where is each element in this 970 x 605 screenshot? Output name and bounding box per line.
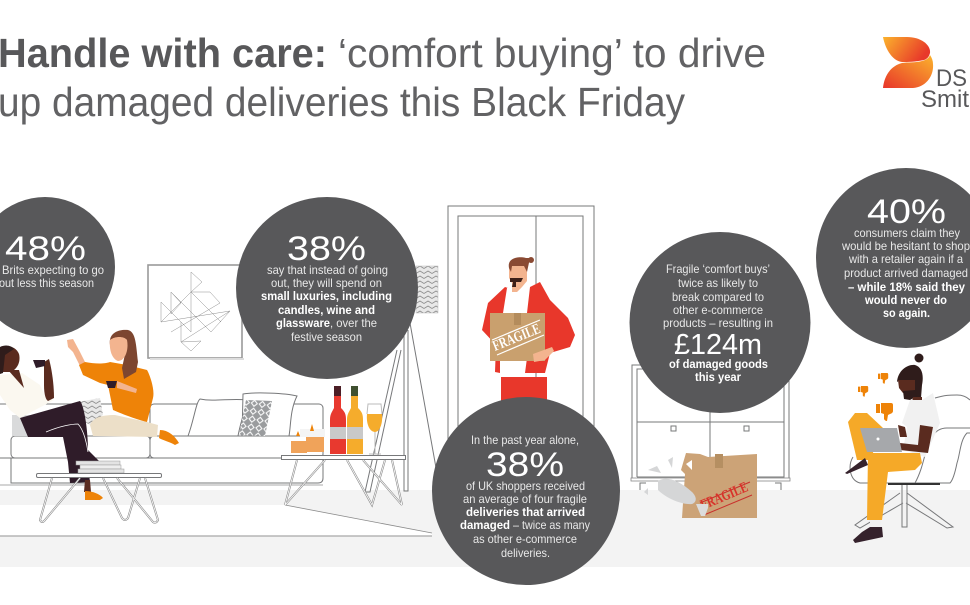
floor [0,490,970,567]
stat circle: 38% damaged deliveries: an average of four fragile [463,492,587,506]
stat circle: 48%: 48% [5,230,86,268]
stat circle: 38% small luxuries: festive season [291,330,362,344]
cushions [188,399,248,436]
stat circle: 38% small luxuries: glassware [276,316,330,330]
stat circle: 38% damaged deliveries: as other e-commerce [473,532,577,546]
logo: DS Smith [883,37,970,113]
broken vase and damaged fragile box: FRAGILE [698,479,751,514]
stat circle: 38% small luxuries: candles, wine and [278,303,375,317]
stat circle: £124m: Fragile ‘comfort buys’ [666,262,770,276]
stat circle: 38% damaged deliveries [432,397,620,585]
logo: DS Smith: DS [936,65,967,92]
title [0,30,766,125]
chair [935,395,970,400]
title: up damaged deliveries this Black Friday [0,79,685,125]
stat circle: £124m [630,232,810,413]
body [914,354,924,362]
thumbs down icons [876,403,893,421]
sofa [0,393,323,485]
stat circle: £124m: break compared to [672,290,764,304]
door [448,206,594,490]
stat circle: £124m: £124m [674,329,762,361]
man with fragile box: FRAGILE [491,321,543,355]
stat circle: 38% damaged deliveries: deliveries. [501,546,550,560]
floor lamp [365,266,440,492]
title: Handle with care: [0,30,327,76]
stat circle: 40%: so again. [883,306,930,320]
stack of books [76,461,124,473]
stat circle: 38% small luxuries: 38% [287,230,366,268]
man on chair with laptop [845,354,970,543]
man with fragile box [482,257,575,405]
stat circle: 38% damaged deliveries: – twice as many [513,518,590,532]
stat circle: 48%: out less this season [0,276,94,290]
title: ‘comfort buying’ to drive [338,30,766,76]
stat circle: 40%: would never do [864,293,947,307]
stat circle: 38% damaged deliveries: deliveries that arrived [466,505,585,519]
stat circle: 40%: with a retailer again if a [848,252,963,266]
laptop [860,428,902,452]
broken vase and damaged fragile box [644,453,757,518]
coffee table [36,474,162,523]
stat circle: 38% damaged deliveries: damaged [460,518,510,532]
stat circle: 48%: Brits expecting to go [2,263,104,277]
picture frame [148,265,244,360]
stat circle: 38% small luxuries: out, they will spend on [271,276,382,290]
woman in orange sweater [67,330,179,445]
stat circle: 38% small luxuries: say that instead of going [267,263,388,277]
stat circle: 38% small luxuries [236,197,418,379]
stat circle: 38% damaged deliveries: In the past year alone, [471,433,579,447]
stat circle: 38% damaged deliveries: of UK shoppers received [466,479,585,493]
stat circle: 40%: – while 18% said they [848,280,965,294]
stat circle: 40%: 40% [867,193,946,231]
stat circle: £124m: of damaged goods [669,357,768,371]
woman with dark skin [0,346,103,500]
bottles, wine glass and candles [291,386,382,454]
stat circle: 40%: consumers claim they [854,226,960,240]
side table [282,456,406,505]
stat circle: £124m: twice as likely to [678,276,758,290]
stat circle: £124m: other e-commerce [673,303,763,317]
box [490,313,545,361]
stat circle: 38% damaged deliveries: 38% [486,446,564,484]
stat circle: 48% [0,197,115,337]
stat circle: £124m: products – resulting in [663,316,773,330]
cabinet [631,365,790,490]
stat circle: 38% small luxuries: small luxuries, including [261,289,392,303]
stat circle: 40% [816,168,970,348]
stat circle: 38% small luxuries: , over the [330,316,377,330]
stat circle: £124m: this year [695,370,741,384]
